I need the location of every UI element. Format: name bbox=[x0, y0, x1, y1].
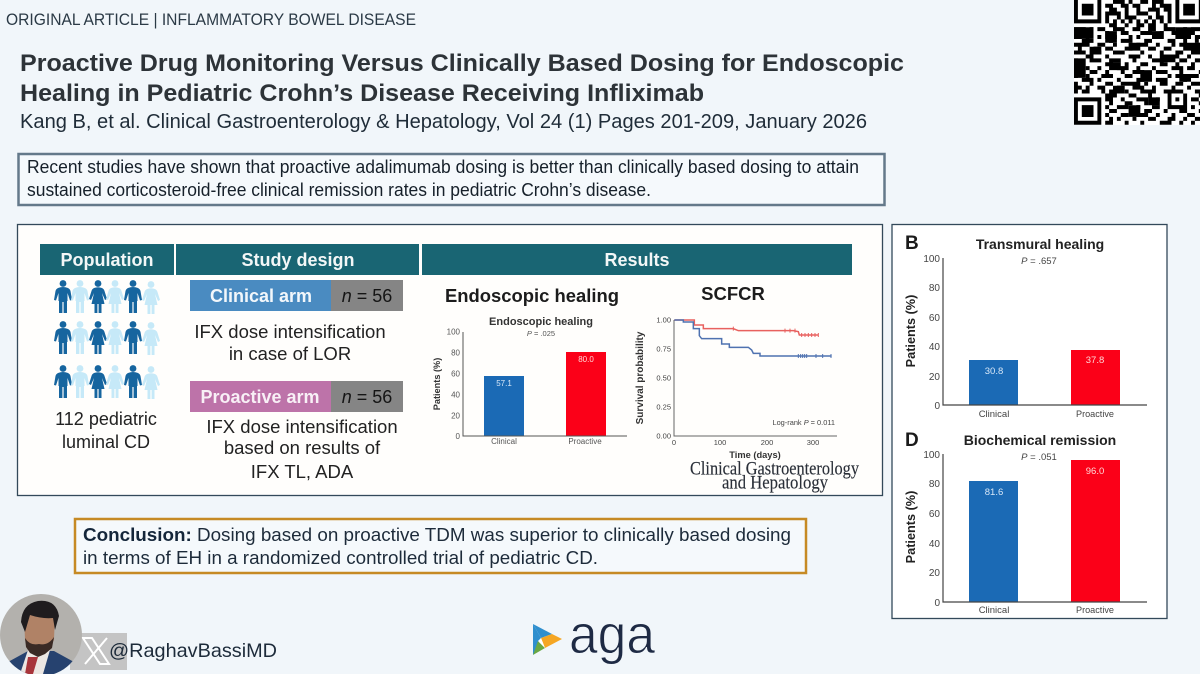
proactive arm description: IFX dose intensification bbox=[206, 416, 398, 437]
clinical arm description: IFX dose intensification bbox=[194, 321, 386, 342]
background statement box: sustained corticosteroid-free clinical remission rates in pediatric Crohn’s disease. bbox=[27, 180, 651, 200]
bar chart: transmural healing bbox=[904, 233, 1147, 420]
bar chart: endoscopic healing: P = .025 bbox=[527, 329, 555, 338]
bar chart: transmural healing: 0 bbox=[934, 401, 940, 412]
header: Population: Population bbox=[60, 250, 154, 270]
bar chart: biochemical remission: 100 bbox=[923, 450, 940, 461]
panel: secondary outcomes bbox=[892, 224, 1167, 618]
proactive arm label bbox=[190, 381, 403, 412]
bar chart: endoscopic healing: 80 bbox=[451, 348, 461, 358]
QR code bbox=[1074, 0, 1200, 125]
clinical arm description: in case of LOR bbox=[229, 343, 351, 364]
bar chart: endoscopic healing: 0 bbox=[456, 432, 461, 441]
population label: luminal CD bbox=[62, 432, 150, 452]
social handle: @RaghavBassiMD bbox=[109, 640, 277, 662]
bar chart: transmural healing: B bbox=[905, 233, 919, 254]
bar chart: transmural healing: 40 bbox=[929, 342, 940, 353]
clinical arm label: n = 56 bbox=[342, 286, 392, 306]
bar chart: biochemical remission: Patients (%) bbox=[904, 491, 918, 563]
proactive arm label: Proactive arm bbox=[200, 387, 320, 407]
proactive arm description bbox=[206, 416, 398, 482]
header: Study design: Study design bbox=[241, 250, 355, 270]
heading: SCFCR: SCFCR bbox=[701, 283, 765, 304]
line chart: survival probability: 0 bbox=[672, 438, 676, 447]
bar chart: biochemical remission: Clinical bbox=[979, 605, 1009, 616]
bar chart: biochemical remission: P = .051 bbox=[1021, 452, 1057, 463]
bar chart: transmural healing: Clinical bbox=[979, 409, 1009, 420]
proactive arm description: based on results of bbox=[224, 437, 381, 458]
line chart: survival probability: 300 bbox=[807, 438, 819, 447]
line chart: survival probability: 0.00 bbox=[656, 432, 671, 440]
line chart: survival probability: 200 bbox=[761, 438, 773, 447]
bar chart: transmural healing: 20 bbox=[929, 372, 940, 383]
bar chart: biochemical remission: 40 bbox=[929, 539, 940, 550]
line chart: survival probability: 0.50 bbox=[656, 374, 671, 382]
bar chart: transmural healing: P = .657 bbox=[1021, 256, 1057, 267]
journal name: and Hepatology bbox=[722, 472, 828, 494]
bar chart: endoscopic healing: Endoscopic healing bbox=[489, 316, 593, 328]
line chart: survival probability: Survival probability bbox=[635, 331, 646, 424]
header: Study design bbox=[176, 244, 419, 275]
clinical arm description bbox=[194, 321, 386, 364]
bar chart: biochemical remission: D bbox=[905, 430, 919, 451]
bar chart: transmural healing: Patients (%) bbox=[904, 295, 918, 367]
bar chart: endoscopic healing: Patients (%) bbox=[432, 358, 442, 410]
line chart: survival probability: 1.00 bbox=[656, 316, 671, 324]
bar chart: biochemical remission: 81.6 bbox=[985, 487, 1003, 498]
icon: X logo bbox=[70, 633, 127, 670]
icon: population pictogram bbox=[54, 280, 160, 399]
line chart: survival probability bbox=[635, 316, 837, 460]
bar chart: endoscopic healing: 60 bbox=[451, 370, 461, 378]
header: Population bbox=[40, 244, 174, 275]
line chart: survival probability: 100 bbox=[714, 438, 726, 447]
bar chart: endoscopic healing: Clinical bbox=[491, 437, 517, 446]
conclusion box: Conclusion: Dosing based on proactive TDM was superior to clinically based dosing bbox=[83, 525, 791, 545]
AGA logo: aga bbox=[569, 603, 655, 665]
conclusion box bbox=[75, 519, 806, 573]
journal name: Clinical Gastroenterology bbox=[690, 458, 859, 480]
header: Results: Results bbox=[604, 250, 670, 270]
panel: graphical abstract bbox=[18, 224, 882, 496]
bar chart: biochemical remission: Biochemical remission bbox=[964, 432, 1116, 448]
bar chart: transmural healing: 80 bbox=[929, 283, 940, 294]
bar chart: biochemical remission: 96.0 bbox=[1086, 466, 1104, 477]
line chart: survival probability: Log-rank P = 0.011 bbox=[772, 418, 835, 427]
population label bbox=[55, 409, 157, 452]
bar chart: transmural healing: Proactive bbox=[1076, 409, 1114, 420]
line chart: survival probability: 0.25 bbox=[656, 402, 671, 412]
author portrait bbox=[0, 594, 82, 674]
AGA logo bbox=[533, 603, 655, 665]
title: Healing in Pediatric Crohn’s Disease Receiving Infliximab bbox=[20, 80, 704, 107]
heading: Endoscopic healing: Endoscopic healing bbox=[445, 285, 619, 306]
bar chart: endoscopic healing: 80.0 bbox=[578, 355, 594, 364]
clinical arm label: Clinical arm bbox=[210, 286, 312, 306]
bar chart: endoscopic healing bbox=[432, 316, 627, 446]
title bbox=[20, 50, 904, 107]
population label: 112 pediatric bbox=[55, 409, 157, 429]
bar chart: transmural healing: Transmural healing bbox=[976, 236, 1104, 252]
bar chart: endoscopic healing: Proactive bbox=[568, 437, 602, 446]
bar chart: endoscopic healing: 40 bbox=[451, 390, 461, 400]
bar chart: endoscopic healing: 20 bbox=[451, 412, 461, 420]
proactive arm label: n = 56 bbox=[342, 387, 392, 407]
bar chart: transmural healing: 37.8 bbox=[1086, 355, 1104, 366]
article category label: ORIGINAL ARTICLE | INFLAMMATORY BOWEL DISEASE bbox=[6, 10, 416, 29]
background statement box bbox=[18, 154, 884, 205]
bar chart: biochemical remission: 60 bbox=[929, 509, 940, 520]
proactive arm description: IFX TL, ADA bbox=[251, 461, 354, 482]
bar chart: biochemical remission bbox=[904, 430, 1147, 616]
clinical arm label bbox=[190, 280, 403, 311]
conclusion box: in terms of EH in a randomized controlled trial of pediatric CD. bbox=[83, 548, 598, 568]
bar chart: endoscopic healing: 100 bbox=[447, 328, 461, 336]
bar chart: transmural healing: 30.8 bbox=[985, 366, 1003, 377]
bar chart: transmural healing: 100 bbox=[923, 254, 940, 265]
bar chart: transmural healing: 60 bbox=[929, 313, 940, 324]
bar chart: biochemical remission: Proactive bbox=[1076, 605, 1114, 616]
line chart: survival probability: 0.75 bbox=[656, 344, 671, 354]
bar chart: biochemical remission: 20 bbox=[929, 568, 940, 579]
bar chart: biochemical remission: 80 bbox=[929, 479, 940, 490]
bar chart: biochemical remission: 0 bbox=[934, 598, 940, 609]
header: Results bbox=[422, 244, 852, 275]
bar chart: endoscopic healing: 57.1 bbox=[496, 379, 512, 388]
citation: Kang B, et al. Clinical Gastroenterology & Hepatology, Vol 24 (1) Pages 201-209, January 2026 bbox=[20, 111, 867, 133]
background statement box: Recent studies have shown that proactive adalimumab dosing is better than clinically based dosing to attain bbox=[27, 157, 859, 177]
line chart: survival probability: Time (days) bbox=[729, 450, 781, 460]
title: Proactive Drug Monitoring Versus Clinically Based Dosing for Endoscopic bbox=[20, 50, 904, 77]
journal name bbox=[690, 458, 859, 494]
